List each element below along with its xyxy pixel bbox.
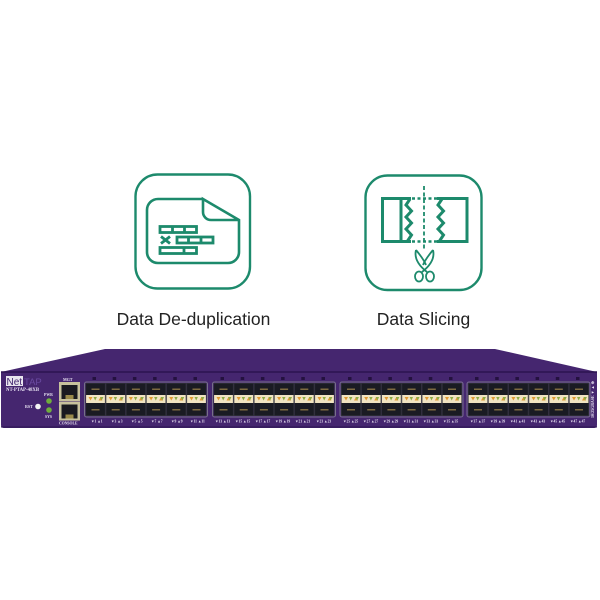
port group 1 [84, 377, 208, 417]
port labels: ▼11 ▲11 [190, 420, 205, 424]
LED indicators: PWR [44, 393, 53, 397]
LED indicators: SYS [45, 415, 52, 419]
port labels: ▼35 ▲35 [443, 420, 458, 424]
management ports [59, 377, 80, 426]
port group 2 [212, 377, 336, 417]
device chassis [1, 349, 597, 428]
LED indicators: RST [25, 404, 33, 409]
management ports: CONSOLE [59, 422, 78, 426]
vertical side label: 10/25GBASE ▼ ▲ ⊕ [590, 380, 595, 418]
device: network tap appliance [1, 349, 597, 428]
port labels: ▼27 ▲27 [363, 420, 378, 424]
model name: NT-PTAP-48XB [6, 388, 40, 393]
port labels: ▼21 ▲21 [295, 420, 310, 424]
port labels: ▼41 ▲41 [510, 420, 525, 424]
port labels: ▼29 ▲29 [383, 420, 398, 424]
port group 3 [340, 377, 463, 417]
port labels: ▼1 ▲1 [91, 420, 103, 424]
port labels: ▼7 ▲7 [151, 420, 163, 424]
port labels: ▼9 ▲9 [171, 420, 183, 424]
port labels: ▼17 ▲17 [255, 420, 270, 424]
brand logo: TAP [24, 377, 42, 388]
port labels: ▼45 ▲45 [550, 420, 565, 424]
label: Data Slicing: Data Slicing [377, 309, 470, 329]
port labels: ▼25 ▲25 [343, 420, 358, 424]
port labels: ▼5 ▲5 [131, 420, 143, 424]
port labels: ▼33 ▲33 [423, 420, 438, 424]
port labels: ▼43 ▲43 [530, 420, 545, 424]
port labels [91, 420, 585, 424]
label: Data De-duplication: Data De-duplication [117, 309, 270, 329]
port labels: ▼47 ▲47 [570, 420, 585, 424]
port labels: ▼13 ▲13 [215, 420, 230, 424]
brand logo: Net [6, 377, 22, 388]
port labels: ▼3 ▲3 [111, 420, 123, 424]
brand logo [6, 376, 42, 388]
port group 4 [467, 377, 590, 417]
LED indicators [25, 393, 53, 419]
icon: data slicing [366, 176, 482, 290]
icon: data de-duplication [136, 174, 250, 288]
port labels: ▼15 ▲15 [235, 420, 250, 424]
port labels: ▼37 ▲37 [470, 420, 485, 424]
port labels: ▼23 ▲23 [316, 420, 331, 424]
management ports: MGT [63, 377, 73, 382]
port labels: ▼31 ▲31 [403, 420, 418, 424]
port labels: ▼39 ▲39 [490, 420, 505, 424]
port labels: ▼19 ▲19 [275, 420, 290, 424]
